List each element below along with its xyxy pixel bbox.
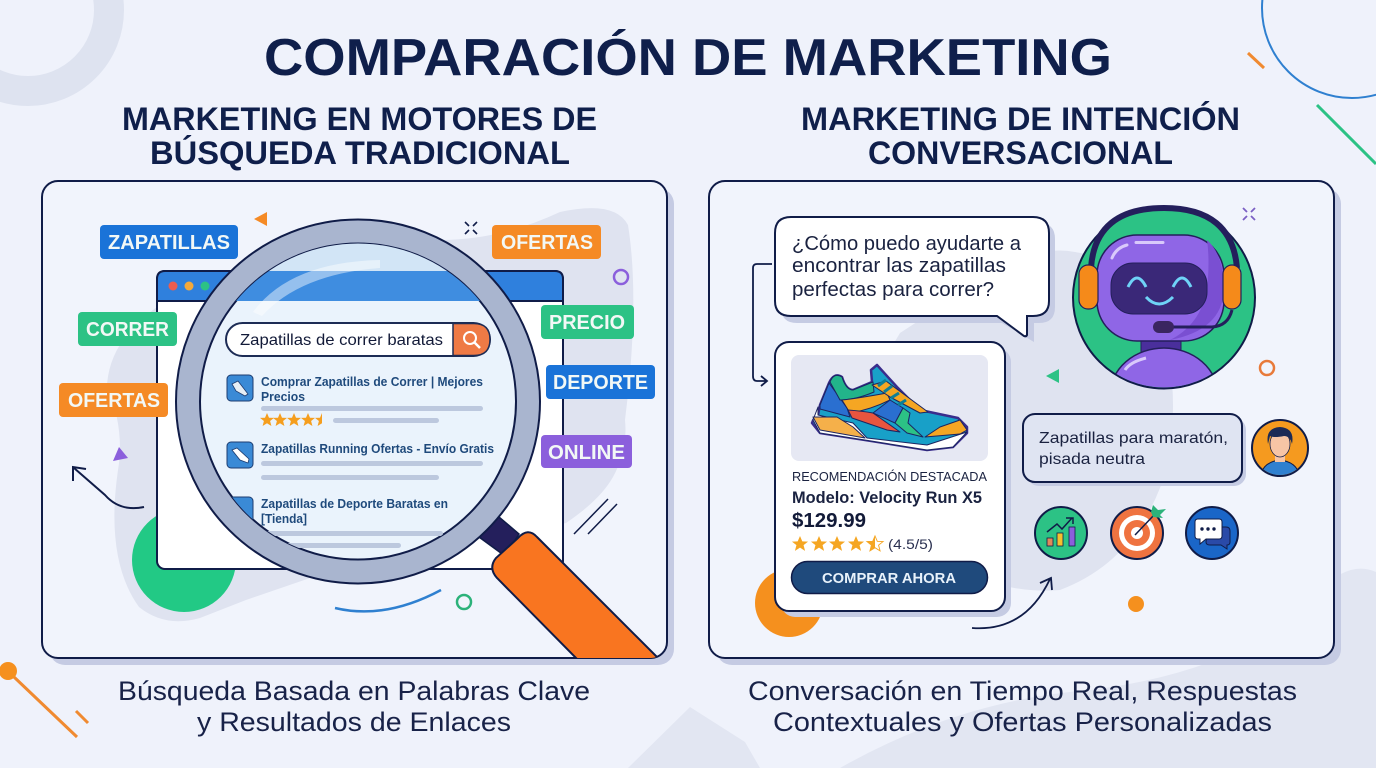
caption: conversational intent: Conversación en Tiempo Real, Respuestas: [748, 676, 1297, 706]
product card: $129.99: [792, 510, 866, 532]
product card: RECOMENDACIÓN DESTACADA: [792, 469, 987, 484]
user speech bubble: pisada neutra: [1039, 451, 1145, 468]
search result 3: Zapatillas de Deporte Baratas en: [261, 497, 448, 511]
orange circle: [755, 569, 823, 637]
keyword tags: CORRER: [86, 319, 170, 341]
search result 3: [Tienda]: [261, 512, 307, 526]
caption: traditional search: [118, 676, 590, 737]
keyword tags: ZAPATILLAS: [108, 232, 230, 254]
arrow: curved to icons: [972, 578, 1052, 628]
icon: user avatar: [1252, 420, 1308, 478]
heading: traditional search marketing: [122, 101, 597, 171]
search box: Zapatillas de correr baratas: [240, 332, 443, 349]
product card: Modelo: Velocity Run X5: [792, 489, 982, 507]
small shapes: [113, 212, 628, 611]
robot speech bubble: encontrar las zapatillas: [792, 255, 1006, 277]
user speech bubble: [1023, 414, 1246, 486]
arrow: bubble to product: [753, 264, 772, 386]
keyword tags: OFERTAS: [501, 232, 593, 254]
small shapes: [1046, 208, 1274, 612]
keyword tags: ONLINE: [548, 442, 625, 464]
product card: [775, 342, 1011, 617]
search result 1: Comprar Zapatillas de Correr | Mejores: [261, 375, 483, 389]
panel: conversational intent: [709, 181, 1341, 665]
arrow: curved left: [73, 467, 144, 508]
title: COMPARACIÓN DE MARKETING: [264, 29, 1112, 87]
caption: conversational intent: [748, 676, 1297, 737]
heading: conversational intent marketing: [801, 101, 1240, 171]
caption: conversational intent: Contextuales y Ofertas Personalizadas: [773, 707, 1272, 737]
search box: [226, 323, 490, 356]
robot speech bubble: ¿Cómo puedo ayudarte a: [792, 233, 1022, 255]
green circle: [132, 508, 236, 612]
search result 2: [227, 442, 494, 480]
heading: traditional search marketing: MARKETING EN MOTORES DE: [122, 101, 597, 137]
icon: running shoe: [812, 365, 967, 450]
robot speech bubble: [775, 217, 1055, 342]
search result 2: Zapatillas Running Ofertas - Envío Gratis: [261, 442, 494, 456]
search result 1: [227, 375, 483, 426]
robot speech bubble: perfectas para correr?: [792, 279, 994, 301]
icon: chat bubbles: [1186, 507, 1238, 559]
background blob: [896, 250, 1173, 590]
heading: traditional search marketing: BÚSQUEDA TRADICIONAL: [150, 135, 570, 171]
icon: growth chart: [1035, 507, 1087, 559]
keyword tags: PRECIO: [549, 312, 625, 334]
buy button: [792, 562, 988, 594]
caption: traditional search: Búsqueda Basada en Palabras Clave: [118, 676, 590, 706]
keyword tags: [59, 225, 655, 468]
icon: target: [1111, 505, 1166, 559]
panel: traditional search: [42, 181, 674, 665]
keyword tags: DEPORTE: [553, 372, 648, 394]
search result 1: Precios: [261, 390, 305, 404]
magnifier handle: [479, 517, 660, 660]
robot avatar: [1072, 205, 1256, 390]
search result 3: [227, 497, 448, 548]
heading: conversational intent marketing: CONVERSACIONAL: [868, 135, 1173, 171]
rating stars: [792, 536, 883, 551]
magnifier lens: [176, 220, 540, 584]
browser window: [157, 271, 563, 569]
background blob: [107, 208, 633, 621]
caption: traditional search: y Resultados de Enlaces: [197, 707, 511, 737]
heading: conversational intent marketing: MARKETING DE INTENCIÓN: [801, 101, 1240, 137]
product card: (4.5/5): [888, 536, 933, 552]
user speech bubble: Zapatillas para maratón,: [1039, 430, 1228, 447]
keyword tags: OFERTAS: [68, 390, 160, 412]
buy button: COMPRAR AHORA: [822, 571, 957, 587]
